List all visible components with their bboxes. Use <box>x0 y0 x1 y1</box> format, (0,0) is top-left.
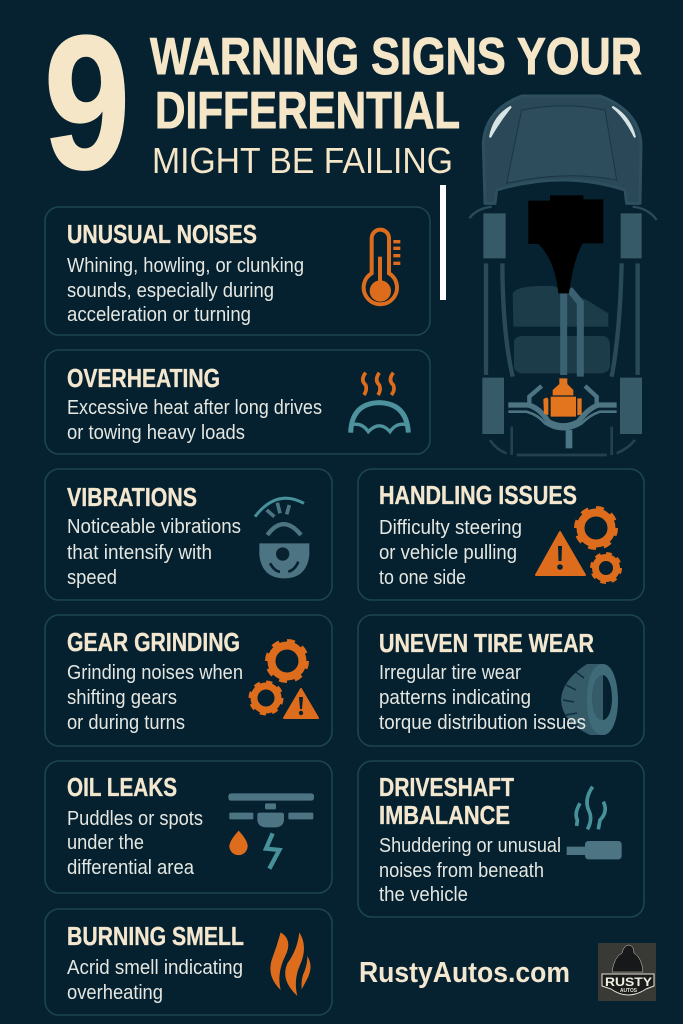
logo wordmark: RUSTY <box>605 975 652 989</box>
panel: overheating <box>45 350 430 454</box>
card background <box>358 761 644 917</box>
description: that intensify with <box>67 542 212 564</box>
front suspension arms <box>469 207 657 220</box>
big number 9: 9 <box>44 0 130 209</box>
icon: gears and warning <box>250 642 318 718</box>
description: or vehicle pulling <box>379 542 517 564</box>
description: Excessive heat after long drives <box>67 397 322 419</box>
icon: tire <box>561 664 618 735</box>
panel: driveshaft imbalance <box>358 761 644 917</box>
description: to one side <box>379 567 466 589</box>
black engine block <box>528 195 603 293</box>
description <box>67 662 243 734</box>
subtitle: might be failing: MIGHT BE FAILING <box>152 140 453 181</box>
description <box>67 516 241 589</box>
heading: DRIVESHAFT <box>379 772 514 802</box>
logo: rusty autos <box>598 943 656 1001</box>
description: noises from beneath <box>379 860 544 882</box>
icon: thermometer <box>364 230 400 304</box>
description: shifting gears <box>67 687 177 709</box>
orange differential housing <box>543 378 582 417</box>
description <box>67 808 203 879</box>
description <box>379 662 586 734</box>
description: Irregular tire wear <box>379 662 521 684</box>
side rails <box>486 263 638 377</box>
rear seats <box>513 286 610 373</box>
card background <box>358 469 644 600</box>
description: sounds, especially during <box>67 280 274 302</box>
logo badge <box>602 974 654 995</box>
car upper body <box>483 96 641 203</box>
description: acceleration or turning <box>67 304 251 326</box>
description: torque distribution issues <box>379 712 586 734</box>
panel: vibrations <box>45 469 332 600</box>
card background <box>45 469 332 600</box>
title line: differential: DIFFERENTIAL <box>155 82 460 140</box>
front wheels <box>483 213 642 258</box>
headlights <box>490 107 635 137</box>
description: or during turns <box>67 712 185 734</box>
description <box>67 397 322 444</box>
logo sub wordmark: AUTOS <box>620 988 638 994</box>
panel: gear grinding <box>45 615 332 746</box>
description: Noticeable vibrations <box>67 516 241 538</box>
panel: uneven tire wear <box>358 615 644 746</box>
heading: HANDLING ISSUES <box>379 480 577 510</box>
card background <box>45 207 430 335</box>
icon: leaking axle <box>228 793 314 869</box>
icon: gears and warning <box>536 508 620 582</box>
panel: unusual noises <box>45 207 430 335</box>
heading: UNEVEN TIRE WEAR <box>379 628 594 658</box>
heading: VIBRATIONS <box>67 482 197 512</box>
description: patterns indicating <box>379 687 531 709</box>
white vertical bar <box>440 185 446 300</box>
card background <box>45 615 332 746</box>
description <box>67 255 304 326</box>
card background <box>45 350 430 454</box>
card background <box>45 761 332 893</box>
description: speed <box>67 567 117 589</box>
heading: UNUSUAL NOISES <box>67 219 257 249</box>
description: Difficulty steering <box>379 517 522 539</box>
card background <box>358 615 644 746</box>
car chassis illustration <box>469 96 657 455</box>
heading: IMBALANCE <box>379 800 510 830</box>
heading: OIL LEAKS <box>67 772 177 802</box>
description: Whining, howling, or clunking <box>67 255 304 277</box>
logo silhouette <box>612 945 643 972</box>
card background <box>45 909 332 1015</box>
icon: overheating wheel <box>351 373 408 433</box>
icon: vibrating wheel <box>255 498 309 578</box>
description <box>379 517 522 589</box>
panel: burning smell <box>45 909 332 1015</box>
driveshaft <box>564 289 580 377</box>
website name: RustyAutos.com <box>359 957 570 989</box>
icon: driveshaft with waves <box>567 787 622 859</box>
description: Acrid smell indicating <box>67 957 243 979</box>
heading: OVERHEATING <box>67 363 220 393</box>
description <box>67 957 243 1004</box>
rear axle <box>508 386 617 448</box>
windshield <box>507 106 617 183</box>
tire sidewall <box>587 664 618 735</box>
description <box>379 835 561 906</box>
description: or towing heavy loads <box>67 422 245 444</box>
heading: GEAR GRINDING <box>67 627 240 657</box>
heading <box>379 772 514 830</box>
description: overheating <box>67 982 163 1004</box>
description: under the <box>67 832 144 854</box>
title block <box>44 0 642 209</box>
description: the vehicle <box>379 884 468 906</box>
rear bumper <box>490 427 635 455</box>
description: Puddles or spots <box>67 808 203 830</box>
description: Shuddering or unusual <box>379 835 561 857</box>
panel: handling issues <box>358 469 644 600</box>
heading: BURNING SMELL <box>67 921 244 951</box>
icon: flames <box>270 932 311 996</box>
description: differential area <box>67 857 195 879</box>
rear wheels <box>482 378 642 434</box>
panel: oil leaks <box>45 761 332 893</box>
description: Grinding noises when <box>67 662 243 684</box>
